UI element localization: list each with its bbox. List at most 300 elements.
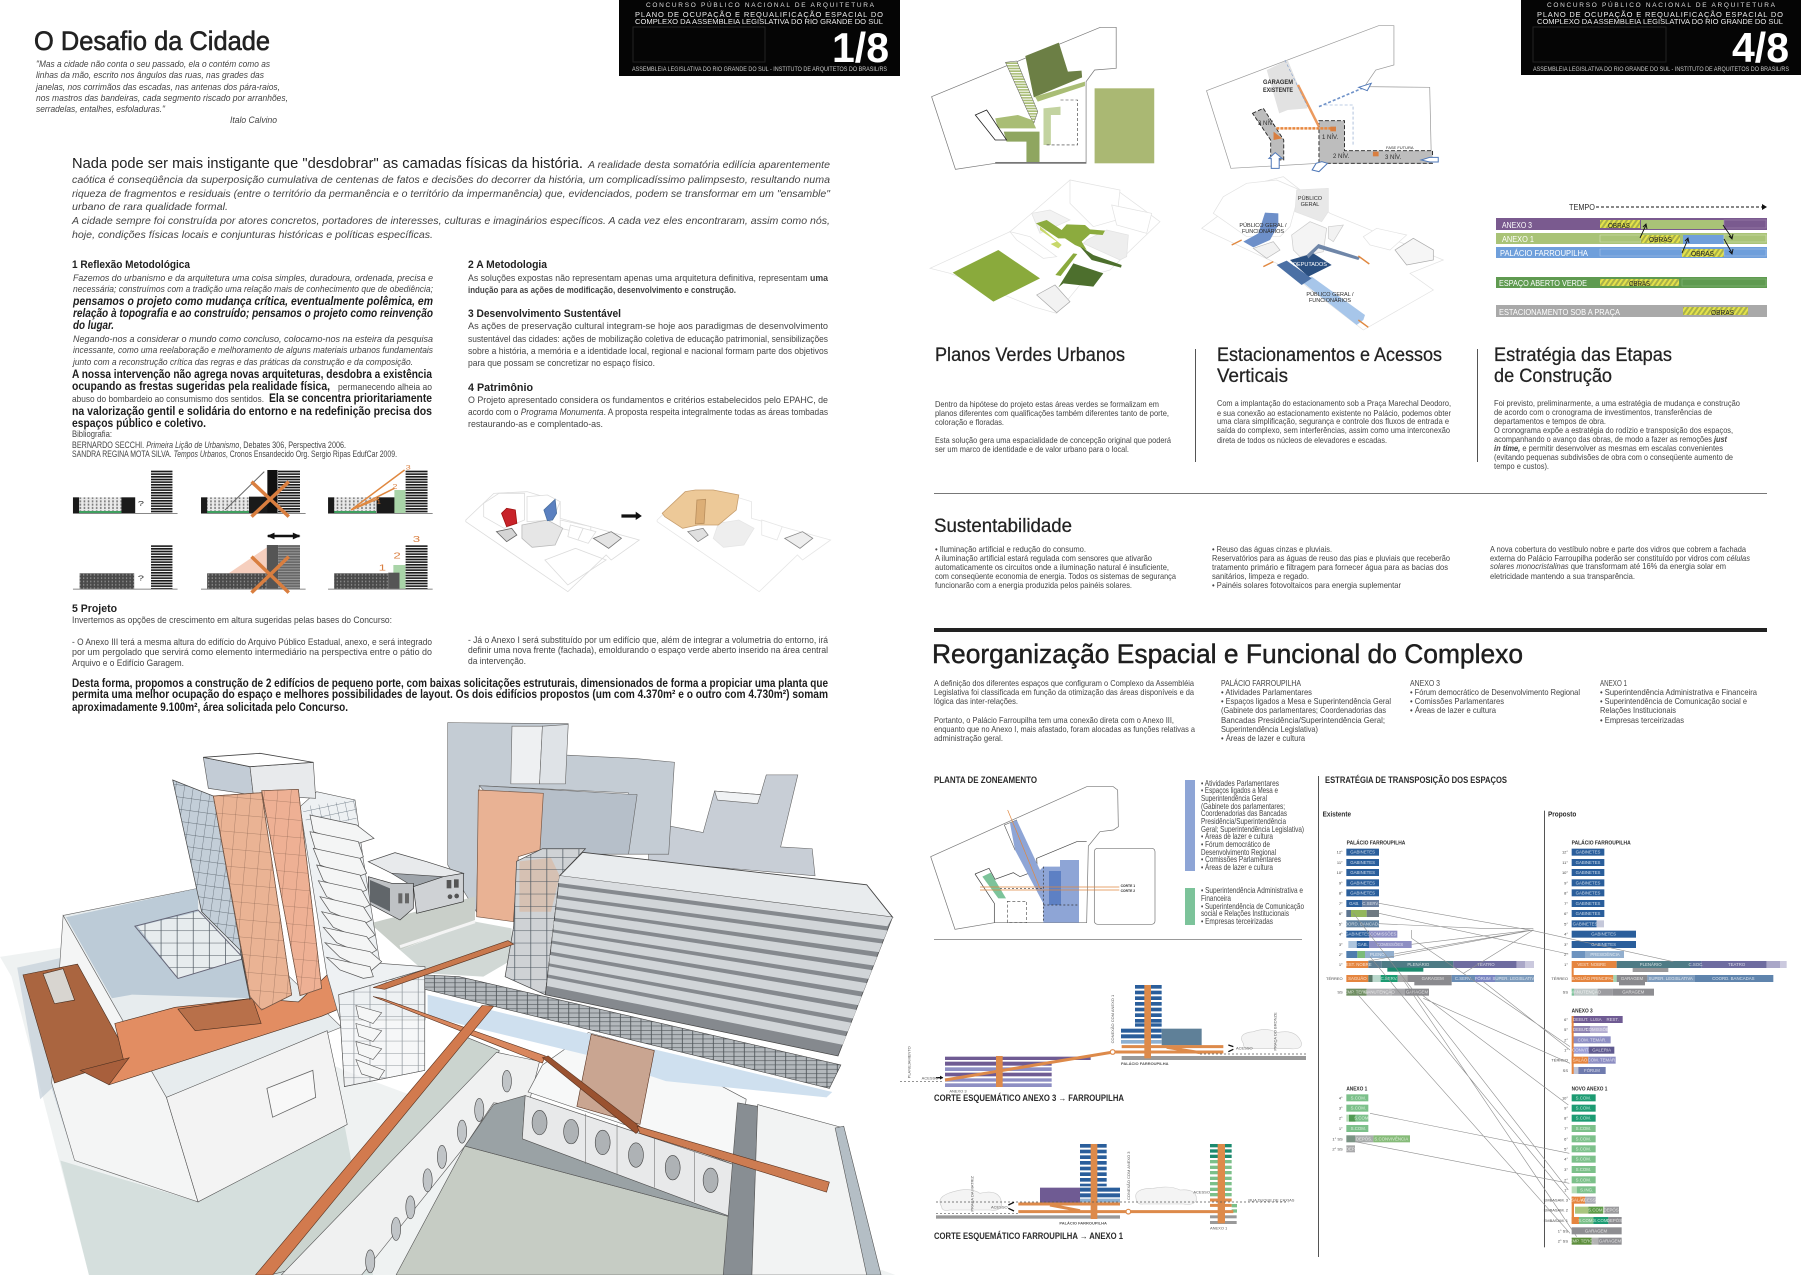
top right plan: parking and access: [1206, 26, 1438, 172]
proposed Novo Anexo 1 bars: 6°: [1564, 1136, 1568, 1141]
section 1 Reflexão Metodológica: Bibliografia:: [72, 429, 112, 440]
proposed Novo Anexo 1 bars: NOVO ANEXO 1: [1572, 1087, 1607, 1093]
section diagram Anexo 3 to Farroupilha: PLANEJAMENTO: [907, 1046, 912, 1078]
header box 1/8: PLANO DE OCUPAÇÃO E REQUALIFICAÇÃO ESPACIAL DO: [635, 10, 883, 19]
proposed Novo Anexo 1 bars: 2° SS: [1558, 1239, 1568, 1244]
proposed Anexo 3 bars: ANEXO 3: [1572, 1008, 1593, 1014]
panel: Planos Verdes Urbanos: planos diferentes com qualificações também diferentes tanto de porte,: [935, 408, 1169, 418]
zoning legend: Geral; Superintendência Legislativa): [1201, 824, 1304, 834]
existing Palacio Farroupilha bars: 8°: [1339, 890, 1343, 895]
proposed Anexo 3 bars: COM. TEMÁR.: [1588, 1058, 1616, 1063]
diagram 4: elevation question: ?: [138, 574, 144, 583]
proposed Novo Anexo 1 bars: S.COM.: [1576, 1126, 1591, 1131]
proposed Novo Anexo 1 bars: S.COM.: [1576, 1136, 1591, 1141]
top right axonometric: vertical access: FUNCIONÁRIOS: [1242, 228, 1284, 235]
top right plan: parking and access: 2 NÍV.: [1333, 153, 1349, 160]
section diagram Anexo 3 to Farroupilha: ACESSO: [1236, 1045, 1253, 1050]
proposed Palacio Farroupilha bars: PALÁCIO FARROUPILHA: [1572, 840, 1631, 847]
proposed Novo Anexo 1 bars: S.COM.: [1576, 1177, 1591, 1182]
existing Palacio Farroupilha bars: SS: [1337, 990, 1343, 995]
panel: Estratégia das Etapas de Construção: Estratégia das Etapas: [1494, 345, 1672, 366]
proposed Palacio Farroupilha bars: GABINETES: [1576, 911, 1600, 916]
proposed Novo Anexo 1 bars: EMBASAM. 3: [1544, 1198, 1569, 1203]
existing Anexo 1 bars: 2° SS: [1332, 1146, 1343, 1151]
proposed Palacio Farroupilha bars: PLENÁRIO: [1640, 962, 1662, 967]
top right axonometric: vertical access: PÚBLICO GERAL /: [1306, 291, 1354, 298]
existing Palacio Farroupilha bars: EMP. TERC.: [1345, 990, 1369, 995]
section 1 Reflexão Metodológica: Ela se concentra prioritariamente: [269, 391, 432, 405]
zoning legend: Presidência/Superintendência: [1201, 816, 1286, 826]
proposed Palacio Farroupilha bars: 2°: [1564, 952, 1568, 957]
existing Anexo 1 bars: [1332, 1087, 1410, 1152]
proposed Novo Anexo 1 bars: 4°: [1564, 1157, 1568, 1162]
existing Anexo 1 bars: 1° SS: [1332, 1136, 1343, 1141]
text columns: spatial reorganization: Bancadas Presidência/Superintendência Geral;: [1221, 715, 1385, 725]
proposed Anexo 3 bars: REST.: [1607, 1017, 1619, 1022]
zoning legend: • Atividades Parlamentares: [1201, 778, 1279, 788]
proposed Anexo 3 bars: FÓRUM: [1584, 1068, 1600, 1073]
proposed Palacio Farroupilha bars: 8°: [1564, 890, 1568, 895]
panel: Estacionamentos e Acessos Verticais: Verticais: [1217, 366, 1288, 387]
orange plaza band: [23, 964, 373, 1085]
proposed Novo Anexo 1 bars: DEPÓS.: [1607, 1218, 1623, 1223]
existing Palacio Farroupilha bars: 1°: [1339, 962, 1343, 967]
existing Palacio Farroupilha bars: TEATRO: [1477, 962, 1495, 967]
sections 2 to 4: 4 Patrimônio: [468, 382, 533, 394]
proposed Palacio Farroupilha bars: 5°: [1564, 921, 1568, 926]
proposed Palacio Farroupilha bars: GABINETES: [1573, 921, 1597, 926]
zoning legend: • Áreas de lazer e cultura: [1201, 862, 1273, 872]
existing Palacio Farroupilha bars: COORD. BANCADAS: [1342, 921, 1384, 926]
round glass tower and slab building: [505, 849, 893, 1056]
existing Palacio Farroupilha bars: COMISSÕES: [1370, 932, 1397, 937]
section 5 Projeto: [72, 603, 829, 714]
title: O Desafio da Cidade: [34, 26, 270, 56]
section 1 Reflexão Metodológica: abuso do bombardeio ao consumismo dos sentidos.: [72, 394, 264, 405]
proposed Anexo 3 bars: SS: [1563, 1068, 1568, 1073]
section 1 Reflexão Metodológica: espaços público e coletivo.: [72, 416, 206, 430]
lower glass block: [339, 969, 425, 1087]
section 1 Reflexão Metodológica: 1 Reflexão Metodológica: [72, 259, 191, 271]
panel: Estratégia das Etapas de Construção: de acordo com o cronograma de investimentos, transferências de: [1494, 407, 1712, 417]
courtyard and facades: [270, 1007, 881, 1275]
panel: Planos Verdes Urbanos: Dentro da hipótese do projeto estas áreas verdes se formalizam em: [935, 399, 1159, 409]
section 5 Projeto: 5 Projeto: [72, 603, 117, 615]
panel: Planos Verdes Urbanos: Planos Verdes Urbanos: [935, 345, 1125, 366]
proposed Palacio Farroupilha bars: GABINETES: [1576, 880, 1600, 885]
panel: Sustentabilidade: externa do Palácio Farroupilha poderão ser constituído por vidros com células: [1490, 553, 1751, 563]
existing Palacio Farroupilha bars: PLENO: [1370, 952, 1385, 957]
proposed Palacio Farroupilha bars: C.SOC.: [1689, 962, 1703, 967]
header box 4/8: CONCURSO PÚBLICO NACIONAL DE ARQUITETURA: [1547, 0, 1776, 9]
proposed Palacio Farroupilha bars: GARAGEM: [1622, 990, 1645, 995]
existing Palacio Farroupilha bars: 12°: [1337, 850, 1343, 855]
quote by Italo Calvino: [34, 59, 288, 126]
top right plan: parking and access: EXISTENTE: [1263, 88, 1293, 94]
timeline row Anexo 3: OBRAS: [1608, 221, 1630, 230]
diagram 6: elevation proposed: 1: [379, 564, 386, 573]
section diagram Farroupilha to Anexo 1: PALÁCIO FARROUPILHA: [1059, 1220, 1107, 1225]
proposed Novo Anexo 1 bars: GARAGEM: [1585, 1228, 1607, 1233]
section diagram Anexo 3 to Farroupilha: CONEXÃO COM ANEXO 1: [1110, 994, 1115, 1043]
existing Palacio Farroupilha bars: SUPER. LEGISLATIVA: [1492, 976, 1537, 981]
panel: Planos Verdes Urbanos: coloração e floradas.: [935, 417, 1004, 427]
zoning legend: • Comissões Parlamentares: [1201, 854, 1281, 864]
existing Palacio Farroupilha bars: GABINETES: [1350, 870, 1375, 875]
proposed Novo Anexo 1 bars: 9°: [1564, 1106, 1568, 1111]
sections 2 to 4: para que possam se concretizar no espaço físico.: [468, 358, 655, 369]
existing Palacio Farroupilha bars: 9°: [1339, 880, 1343, 885]
zoning plan: CORTE 2: [1121, 889, 1135, 893]
panel: Estratégia das Etapas de Construção: O cronograma expõe a estratégia do rodízio e transposição dos espaços,: [1494, 425, 1733, 435]
diagram 6: elevation proposed: [328, 535, 433, 590]
panel: Estratégia das Etapas de Construção: (evitando pequenas subdivisões de obra com o conseqüente aumento de: [1494, 452, 1733, 462]
construction timeline chart: [1496, 202, 1767, 317]
fire stair balconies: [310, 815, 382, 978]
proposed Anexo 3 bars: CONVIT.: [1572, 1048, 1589, 1053]
text columns: spatial reorganization: enquanto que no Anexo I, mais afastado, foram alocadas as funções relativas a: [934, 724, 1195, 734]
skylight and walkway: [425, 975, 841, 1097]
proposed Novo Anexo 1 bars: 1°: [1564, 1187, 1568, 1192]
text columns: spatial reorganization: ANEXO 3: [1410, 678, 1440, 688]
arched windows left facade: [366, 1070, 511, 1273]
quote by Italo Calvino: Italo Calvino: [230, 115, 277, 126]
timeline row Anexo 1: OBRAS: [1649, 235, 1672, 244]
top right plan: parking and access: 3 NÍV.: [1385, 154, 1401, 161]
top right axonometric: vertical access: FUNCIONÁRIOS: [1309, 297, 1351, 304]
proposed Palacio Farroupilha bars: COORD. BANCADAS: [1712, 976, 1755, 981]
timeline row parking: OBRAS: [1711, 308, 1734, 317]
section 1 Reflexão Metodológica: BERNARDO SECCHI. Primeira Lição de Urbanismo, Debates 306, Perspectiva 2006.: [72, 440, 346, 451]
top right axonometric: vertical access: DEPUTADOS: [1293, 262, 1327, 268]
diagram 3: proposed sight lines: 2: [392, 483, 397, 490]
existing Palacio Farroupilha bars: GARAGEM: [1406, 990, 1428, 995]
existing Palacio Farroupilha bars: GAB.: [1349, 901, 1360, 906]
proposed Palacio Farroupilha bars: GABINETES: [1591, 942, 1616, 947]
existing Palacio Farroupilha bars: COMISSÕES: [1377, 942, 1403, 947]
existing Palacio Farroupilha bars: 11°: [1337, 860, 1343, 865]
arrow between axonometrics: [621, 512, 642, 520]
text columns: spatial reorganization: • Comissões Parlamentares: [1410, 696, 1504, 706]
existing Palacio Farroupilha bars: GABINETES: [1350, 880, 1375, 885]
top right axonometric: vertical access: PÚBLICO: [1298, 195, 1323, 202]
proposed Palacio Farroupilha bars: GABINETES: [1576, 860, 1600, 865]
section diagram Anexo 3 to Farroupilha: [900, 985, 1306, 1093]
proposed Palacio Farroupilha bars: GABINETES: [1591, 932, 1616, 937]
intro text: caótica é conseqüência da superposição cumulativa de centenas de fatos e decisões do decorrer da história, um complicadíssimo palimpsesto, resultando numa: [72, 174, 830, 186]
section 5 Projeto: Arquivo e o Edifício Garagem.: [72, 658, 184, 669]
proposed Novo Anexo 1 bars: 8°: [1564, 1116, 1568, 1121]
top right plan: parking and access: 1 NÍV.: [1322, 134, 1338, 141]
panel: Estacionamentos e Acessos Verticais: Com a implantação do estacionamento sob a Praça Marechal Deodoro,: [1217, 398, 1451, 408]
proposed Palacio Farroupilha bars: GABINETES: [1576, 850, 1600, 855]
panel: Sustentabilidade: solares monocristalinas que transformam até 16% da energia solar em: [1490, 561, 1726, 571]
existing Palacio Farroupilha bars: GABINETES: [1350, 890, 1375, 895]
existing Anexo 1 bars: DEP.: [1346, 1146, 1355, 1151]
proposed Palacio Farroupilha bars: SAGUÃO PRINCIPAL: [1572, 976, 1614, 981]
quote by Italo Calvino: janelas, nos corrimãos das escadas, nas antenas dos pára-raios,: [34, 82, 280, 93]
timeline row Anexo 1: ANEXO 1: [1502, 234, 1534, 244]
section 5 Projeto: Invertemos as opções de crescimento em altura sugeridas pelas bases do Concurso:: [72, 615, 392, 626]
zoning legend: • Empresas terceirizadas: [1201, 916, 1273, 926]
timeline row Anexo 3: ANEXO 3: [1502, 220, 1532, 230]
heading: Planta de Zoneamento: PLANTA DE ZONEAMENTO: [934, 775, 1037, 785]
quote by Italo Calvino: serradelas, entalhes, esfoladuras.": [36, 104, 166, 115]
diagram 5: elevation rejected: [201, 533, 306, 593]
sections 2 to 4: As ações de preservação cultural integram-se hoje aos paradigmas de desenvolvimento: [468, 321, 828, 332]
text columns: spatial reorganization: lógica das inter-relações.: [934, 696, 1018, 706]
sections 2 to 4: 3 Desenvolvimento Sustentável: [468, 308, 621, 320]
existing Palacio Farroupilha bars: GABINETES: [1350, 860, 1375, 865]
existing Palacio Farroupilha bars: 2°: [1339, 952, 1343, 957]
text columns: spatial reorganization: • Superintendência de Comunicação social e: [1600, 696, 1747, 706]
panel: Estacionamentos e Acessos Verticais: direta de todos os núcleos de elevadores e escadas.: [1217, 435, 1387, 445]
existing Anexo 1 bars: S.COM.: [1351, 1095, 1366, 1100]
section diagram Farroupilha to Anexo 1: ANEXO 1: [1210, 1226, 1228, 1231]
panel: Sustentabilidade: com conseqüente economia de energia. Todos os sistemas de segurança: [935, 571, 1176, 581]
proposed Novo Anexo 1 bars: EMBASAM. 1: [1544, 1218, 1569, 1223]
proposed Palacio Farroupilha bars: GARAGEM: [1621, 976, 1643, 981]
existing Anexo 1 bars: ANEXO 1: [1346, 1087, 1367, 1093]
proposed Palacio Farroupilha bars: TEATRO: [1728, 962, 1746, 967]
section 1 Reflexão Metodológica: na valorização gentil e solidária do entorno e na redefinição precisa dos: [72, 404, 432, 418]
section diagram Anexo 3 to Farroupilha: ACESSO: [922, 1075, 938, 1080]
proposed Anexo 3 bars: 5°: [1564, 1027, 1568, 1032]
courtyard plaza and historic building: [368, 853, 512, 977]
proposed Novo Anexo 1 bars: S.COM.: [1576, 1146, 1591, 1151]
existing Palacio Farroupilha bars: 5°: [1339, 921, 1343, 926]
panel: Estratégia das Etapas de Construção: departamentos e tempos de obra.: [1494, 416, 1606, 426]
proposed Anexo 3 bars: LUSA: [1590, 1017, 1602, 1022]
section 5 Projeto: aproximadamente 9.100m², área solicitada pelo Concurso.: [72, 700, 348, 714]
text columns: spatial reorganization: Portanto, o Palácio Farroupilha tem uma conexão direta com o Anexo III,: [934, 715, 1174, 725]
massing option diagrams: [73, 464, 433, 593]
panel: Estacionamentos e Acessos Verticais: uma clara simplificação, segurança e controle dos fluxos de entrada e: [1217, 416, 1449, 426]
top right plan: parking and access: FASE FUTURA: [1386, 145, 1414, 150]
proposed Anexo 3 bars: DEBUT.: [1573, 1027, 1588, 1032]
timeline row parking: ESTACIONAMENTO SOB A PRAÇA: [1499, 307, 1620, 317]
panel: Estratégia das Etapas de Construção: acompanhando o avanço das obras, de modo a fazer as remoções just: [1494, 434, 1728, 444]
existing Anexo 1 bars: S.COM.: [1354, 1116, 1370, 1121]
text columns: spatial reorganization: • Superintendência Administrativa e Financeira: [1600, 687, 1757, 697]
existing Palacio Farroupilha bars: 7°: [1339, 901, 1343, 906]
text columns: spatial reorganization: administração geral.: [934, 733, 1003, 743]
panel: Estacionamentos e Acessos Verticais: saída do complexo, sem interferências, assim como uma interconexão: [1217, 425, 1450, 435]
proposed Anexo 3 bars: 6°: [1564, 1017, 1568, 1022]
proposed Novo Anexo 1 bars: DEPÓS.: [1603, 1208, 1620, 1213]
text columns: spatial reorganization: [934, 678, 1757, 743]
proposed Novo Anexo 1 bars: 10°: [1562, 1095, 1568, 1100]
proposed Novo Anexo 1 bars: S.COM.: [1576, 1106, 1591, 1111]
intro text: [71, 155, 831, 241]
section 1 Reflexão Metodológica: pensamos o projeto como mudança crítica, eventualmente polêmica, em: [72, 294, 433, 308]
existing Palacio Farroupilha bars: GAB.: [1357, 942, 1368, 947]
quote by Italo Calvino: nos mastros das bandeiras, cada segmento riscado por arranhões,: [36, 93, 288, 104]
existing Palacio Farroupilha bars: GARAGEM: [1422, 976, 1444, 981]
text columns: spatial reorganization: Superintendência Legislativa): [1221, 724, 1318, 734]
panel: Estratégia das Etapas de Construção: de Construção: [1494, 366, 1612, 387]
panel: Sustentabilidade: Reservatórios para as águas de reuso das pias e pluviais que receberão: [1212, 553, 1450, 563]
proposed Palacio Farroupilha bars: 12°: [1562, 850, 1568, 855]
top right plan: parking and access: GARAGEM: [1263, 80, 1293, 86]
proposed Novo Anexo 1 bars: S.ING.: [1580, 1187, 1593, 1192]
top right plan: green areas: [932, 27, 1154, 169]
existing Anexo 1 bars: S.CONVIVÊNCIA: [1374, 1136, 1408, 1141]
proposed Palacio Farroupilha bars: PRESIDÊNCIA: [1590, 952, 1620, 957]
caption: corte 2: CORTE ESQUEMÁTICO FARROUPILHA → ANEXO 1: [934, 1231, 1123, 1241]
proposed Palacio Farroupilha bars: 4°: [1564, 932, 1568, 937]
intro text: Nada pode ser mais instigante que "desdobrar" as camadas físicas da história.: [72, 155, 583, 172]
diagram 6: elevation proposed: 2: [393, 552, 401, 561]
text columns: spatial reorganization: A definição dos diferentes espaços que configuram o Complexo da Assembléia: [934, 678, 1194, 688]
existing Anexo 1 bars: S.COM.: [1351, 1106, 1366, 1111]
top right axonometric: vertical access: [1202, 177, 1443, 330]
existing Palacio Farroupilha bars: C.SERV.: [1455, 976, 1472, 981]
section diagram Anexo 3 to Farroupilha: PALÁCIO FARROUPILHA: [1121, 1061, 1169, 1066]
existing Anexo 1 bars: S.COM.: [1351, 1126, 1366, 1131]
section diagram Anexo 3 to Farroupilha: PRAÇA DO BRONZE: [1273, 1012, 1278, 1051]
left glass tower with balconies: [173, 753, 425, 1020]
timeline row open green space: [1496, 277, 1767, 288]
proposed Palacio Farroupilha bars: 10°: [1562, 870, 1568, 875]
section 1 Reflexão Metodológica: necessária; construímos com a tradição uma relação mais de conhecimento que de obediência;: [73, 284, 433, 295]
construction timeline chart: TEMPO: [1569, 202, 1595, 212]
diagram 3: proposed sight lines: 3: [406, 464, 411, 471]
proposed Palacio Farroupilha bars: GABINETES: [1576, 870, 1600, 875]
arched windows right facade: [532, 1110, 718, 1193]
panel: Sustentabilidade: Sustentabilidade: [934, 516, 1072, 537]
proposed Palacio Farroupilha bars: 7°: [1564, 901, 1568, 906]
section diagram Farroupilha to Anexo 1: ACESSO: [1193, 1189, 1210, 1194]
proposed Anexo 3 bars: COM. TEMÁR.: [1578, 1037, 1606, 1042]
existing Palacio Farroupilha bars: TÉRREO: [1326, 976, 1343, 981]
intro text: A cidade sempre foi construída por atores concretos, portadores de interesses, culturas e imaginários específicos. A cada vez eles encontraram, assim como nós,: [71, 215, 830, 227]
section diagram Farroupilha to Anexo 1: RUA DUQUE DE CAXIAS: [1248, 1197, 1295, 1202]
section 5 Projeto: permita uma melhor ocupação do espaço e melhores possibilidades de layout. Os dois edifícios propostos (um com 4.370m² e o outro com 4.730m²) somam: [72, 687, 828, 701]
existing Palacio Farroupilha bars: SAGUÃO: [1348, 976, 1367, 981]
panel: Estacionamentos e Acessos Verticais: e sua conexão ao estacionamento existente no Palácio, podemos obter: [1217, 408, 1451, 418]
proposed Novo Anexo 1 bars: [1544, 1087, 1623, 1245]
section 5 Projeto: - O Anexo III terá a mesma altura do edifício do Arquivo Público Estadual, anexo, e será integrado: [72, 637, 432, 648]
zoning plan: CORTE 1: [1121, 884, 1135, 888]
proposed Palacio Farroupilha bars: VEST. NOBRE: [1577, 962, 1606, 967]
existing Palacio Farroupilha bars: C.SERV.: [1381, 976, 1397, 981]
diagram 6: elevation proposed: 3: [413, 535, 420, 544]
section 5 Projeto: - Já o Anexo I será substituído por um edifício que, além de integrar a volumetria do entorno, irá: [468, 635, 829, 646]
transfer arrows: [1640, 224, 1733, 254]
text columns: spatial reorganization: (Gabinete dos parlamentares; Coordenadorias das: [1221, 705, 1386, 715]
existing Palacio Farroupilha bars: [1326, 840, 1537, 996]
section 1 Reflexão Metodológica: ocupando as frestas sugeridas pela realidade física,: [72, 379, 330, 393]
top right axonometric: vertical access: PÚBLICO GERAL /: [1239, 222, 1287, 229]
text columns: spatial reorganization: • Áreas de lazer e cultura: [1410, 705, 1496, 715]
panel: Estacionamentos e Acessos Verticais: Estacionamentos e Acessos: [1217, 345, 1442, 366]
panel: Estacionamentos e Acessos Verticais: [1195, 345, 1451, 462]
proposed Palacio Farroupilha bars: [1551, 840, 1787, 996]
diagram 1: question: ?: [138, 500, 144, 508]
header box 1/8: COMPLEXO DA ASSEMBLEIA LEGISLATIVA DO RIO GRANDE DO SUL: [635, 17, 883, 26]
sections 2 to 4: sobre a história, a memória e a identidade local, regional e nacional formam parte dos objetivos: [468, 346, 828, 357]
proposed Novo Anexo 1 bars: 1° SS: [1558, 1228, 1568, 1233]
header box 4/8: PLANO DE OCUPAÇÃO E REQUALIFICAÇÃO ESPACIAL DO: [1537, 10, 1783, 19]
proposed Novo Anexo 1 bars: 3°: [1564, 1167, 1568, 1172]
orange towers: [213, 789, 543, 1010]
existing Anexo 1 bars: 1°: [1339, 1126, 1343, 1131]
zoning legend: • Espaços ligados a Mesa e: [1201, 785, 1278, 795]
zoning legend: • Fórum democrático de: [1201, 839, 1270, 849]
caption: corte 1: CORTE ESQUEMÁTICO ANEXO 3 → FARROUPILHA: [934, 1093, 1124, 1103]
proposed Palacio Farroupilha bars: 11°: [1562, 860, 1568, 865]
proposed Palacio Farroupilha bars: SUPER. LEGISLATIVA: [1648, 976, 1693, 981]
section diagram Farroupilha to Anexo 1: [936, 1144, 1295, 1231]
intro text: urbano de rara qualidade formal.: [72, 201, 228, 213]
section diagram Anexo 3 to Farroupilha: ANEXO 3: [949, 1088, 967, 1093]
proposed Novo Anexo 1 bars: S.COM.: [1593, 1218, 1609, 1223]
proposed Palacio Farroupilha bars: 6°: [1564, 911, 1568, 916]
proposed Novo Anexo 1 bars: 7°: [1564, 1126, 1568, 1131]
section 1 Reflexão Metodológica: A nossa intervenção não agrega novas arquiteturas, desdobra a existência: [72, 367, 432, 381]
zoning plan: [931, 787, 1155, 929]
proposed Anexo 3 bars: 1°: [1564, 1048, 1568, 1053]
existing Palacio Farroupilha bars: C.SERV.: [1362, 901, 1379, 906]
existing Palacio Farroupilha bars: FÓRUM: [1475, 976, 1491, 981]
text columns: spatial reorganization: • Empresas terceirizadas: [1600, 715, 1684, 725]
panel: Sustentabilidade: A iluminação artificial estará regulada com sensores que ativarão: [935, 553, 1152, 563]
panel: Estratégia das Etapas de Construção: Foi previsto, preliminarmente, a uma estratégia de mudança e construção: [1494, 398, 1740, 408]
text columns: spatial reorganization: • Áreas de lazer e cultura: [1221, 733, 1305, 743]
panel: Planos Verdes Urbanos: [935, 345, 1171, 454]
heading: estrategia de transposicao: ESTRATÉGIA DE TRANSPOSIÇÃO DOS ESPAÇOS: [1325, 775, 1507, 785]
zoning legend: Coordenadorias das Bancadas: [1201, 808, 1287, 818]
section 1 Reflexão Metodológica: Negando-nos a considerar o mundo como concluso, colocamo-nos na esteira da pesquisa: [73, 334, 433, 345]
timeline row Anexo 1: [1496, 233, 1767, 244]
zoning legend: social e Relações Institucionais: [1201, 908, 1289, 918]
proposed Novo Anexo 1 bars: EMP. TERC.: [1570, 1239, 1594, 1244]
diagram 3: proposed sight lines: 1: [377, 500, 381, 506]
diagram 1: question: [73, 470, 178, 514]
section diagram Farroupilha to Anexo 1: CONEXÃO COM ANEXO 3: [1126, 1151, 1131, 1200]
existing Anexo 1 bars: 4°: [1339, 1095, 1343, 1100]
panel: Sustentabilidade: automaticamente os circuitos onde a iluminação natural é insuficiente,: [935, 562, 1169, 572]
sections 2 to 4: As soluções expostas não representam apenas uma arquitetura definitiva, representam uma: [468, 273, 829, 284]
section 1 Reflexão Metodológica: incessante, como uma reelaboração e melhoramento de alguns materiais urbanos fundamentais: [73, 345, 433, 356]
header box 4/8: 4/8: [1732, 24, 1789, 71]
panel: Sustentabilidade: funcionarão com a energia produzida pelos painéis solares.: [935, 580, 1132, 590]
panel: Sustentabilidade: [934, 516, 1751, 590]
zoning legend: • Superintendência Administrativa e: [1201, 885, 1303, 895]
existing Palacio Farroupilha bars: VEST. NOBRE: [1343, 962, 1372, 967]
zoning legend: [1185, 778, 1304, 926]
timeline row Anexo 3: [1496, 218, 1767, 230]
existing Palacio Farroupilha bars: GABINETES: [1345, 932, 1370, 937]
existing Anexo 1 bars: DEPÓS.: [1356, 1136, 1372, 1141]
panel: Sustentabilidade: A nova cobertura do vestíbulo nobre e parte dos vidros que cobrem a fachada: [1490, 544, 1746, 554]
panel: Planos Verdes Urbanos: Esta solução gera uma espacialidade de concepção original que poderá: [935, 435, 1171, 445]
section diagram Farroupilha to Anexo 1: PRAÇA DA MATRIZ: [969, 1176, 974, 1212]
proposed Palacio Farroupilha bars: SS: [1563, 990, 1568, 995]
section 1 Reflexão Metodológica: [71, 259, 433, 460]
text columns: spatial reorganization: • Atividades Parlamentares: [1221, 687, 1312, 697]
panel: Sustentabilidade: sanitários, limpeza e regado.: [1212, 571, 1309, 581]
intro text: riqueza de fragmentos e residuais (entre o território da permanência e o território da impermanência) que, evidenciados, podem se transformar em um "ensamble": [72, 188, 831, 200]
diagram 4: elevation question: [73, 545, 178, 590]
timeline row Palacio: OBRAS: [1691, 249, 1714, 258]
proposed Novo Anexo 1 bars: S.COM.: [1576, 1167, 1591, 1172]
zoning legend: (Gabinete dos parlamentares;: [1201, 801, 1285, 811]
intro text: hoje, condições físicas locais e conjunturas históricas e políticas específicas.: [72, 229, 433, 241]
panel: Sustentabilidade: tratamento primário e filtragem para fornecer água para as bacias dos: [1212, 562, 1448, 572]
section 5 Projeto: da intervenção.: [468, 656, 526, 667]
